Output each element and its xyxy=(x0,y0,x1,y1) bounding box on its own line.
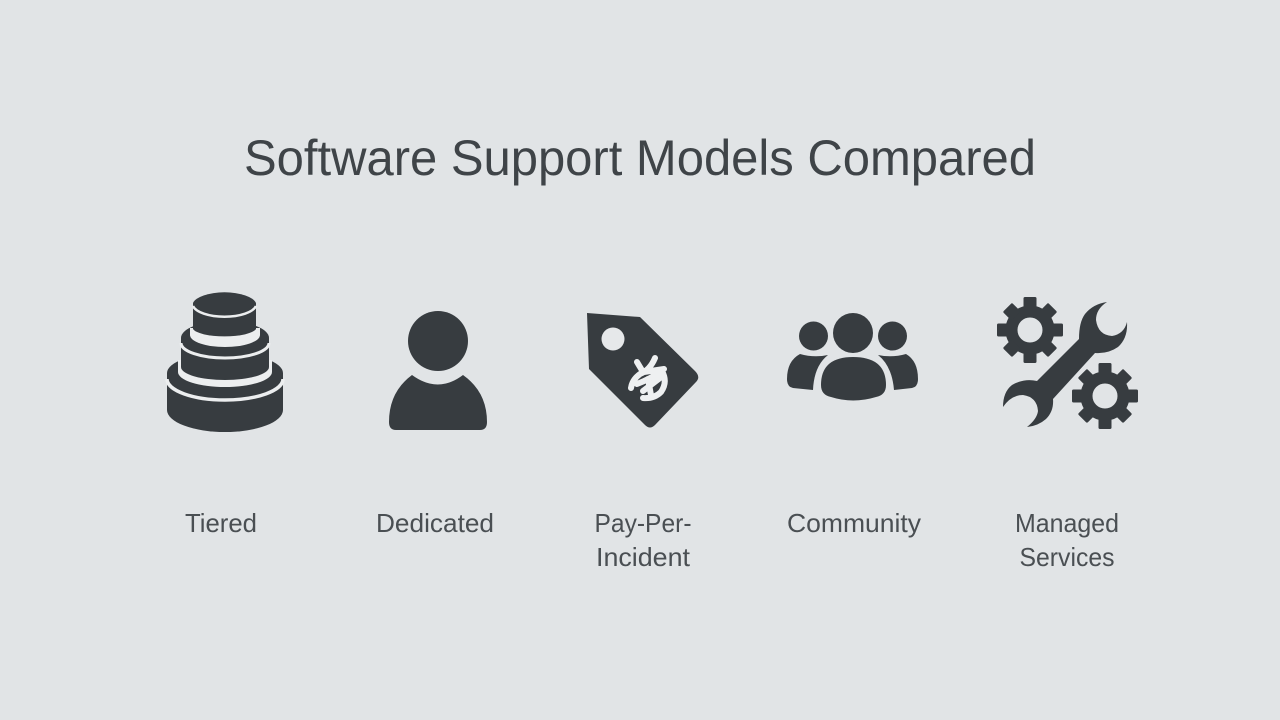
icon: community group xyxy=(787,313,918,400)
label: Pay-Per-Incident: Pay-Per- xyxy=(594,508,692,538)
icon: gears and wrench xyxy=(997,297,1138,429)
icon: dedicated person xyxy=(389,311,487,430)
label: Pay-Per-Incident: Incident xyxy=(596,542,691,572)
label: Tiered: Tiered xyxy=(185,508,257,538)
icon: price tag xyxy=(587,313,698,428)
label: Dedicated: Dedicated xyxy=(376,508,494,538)
label: Managed Services xyxy=(1015,508,1119,572)
label: Managed Services: Managed xyxy=(1015,508,1119,538)
label: Community: Community xyxy=(787,508,921,538)
label: Pay-Per-Incident xyxy=(594,508,692,572)
icon: tiered stack xyxy=(167,292,283,432)
title: Software Support Models Compared xyxy=(244,130,1036,186)
label: Managed Services: Services xyxy=(1020,542,1114,572)
